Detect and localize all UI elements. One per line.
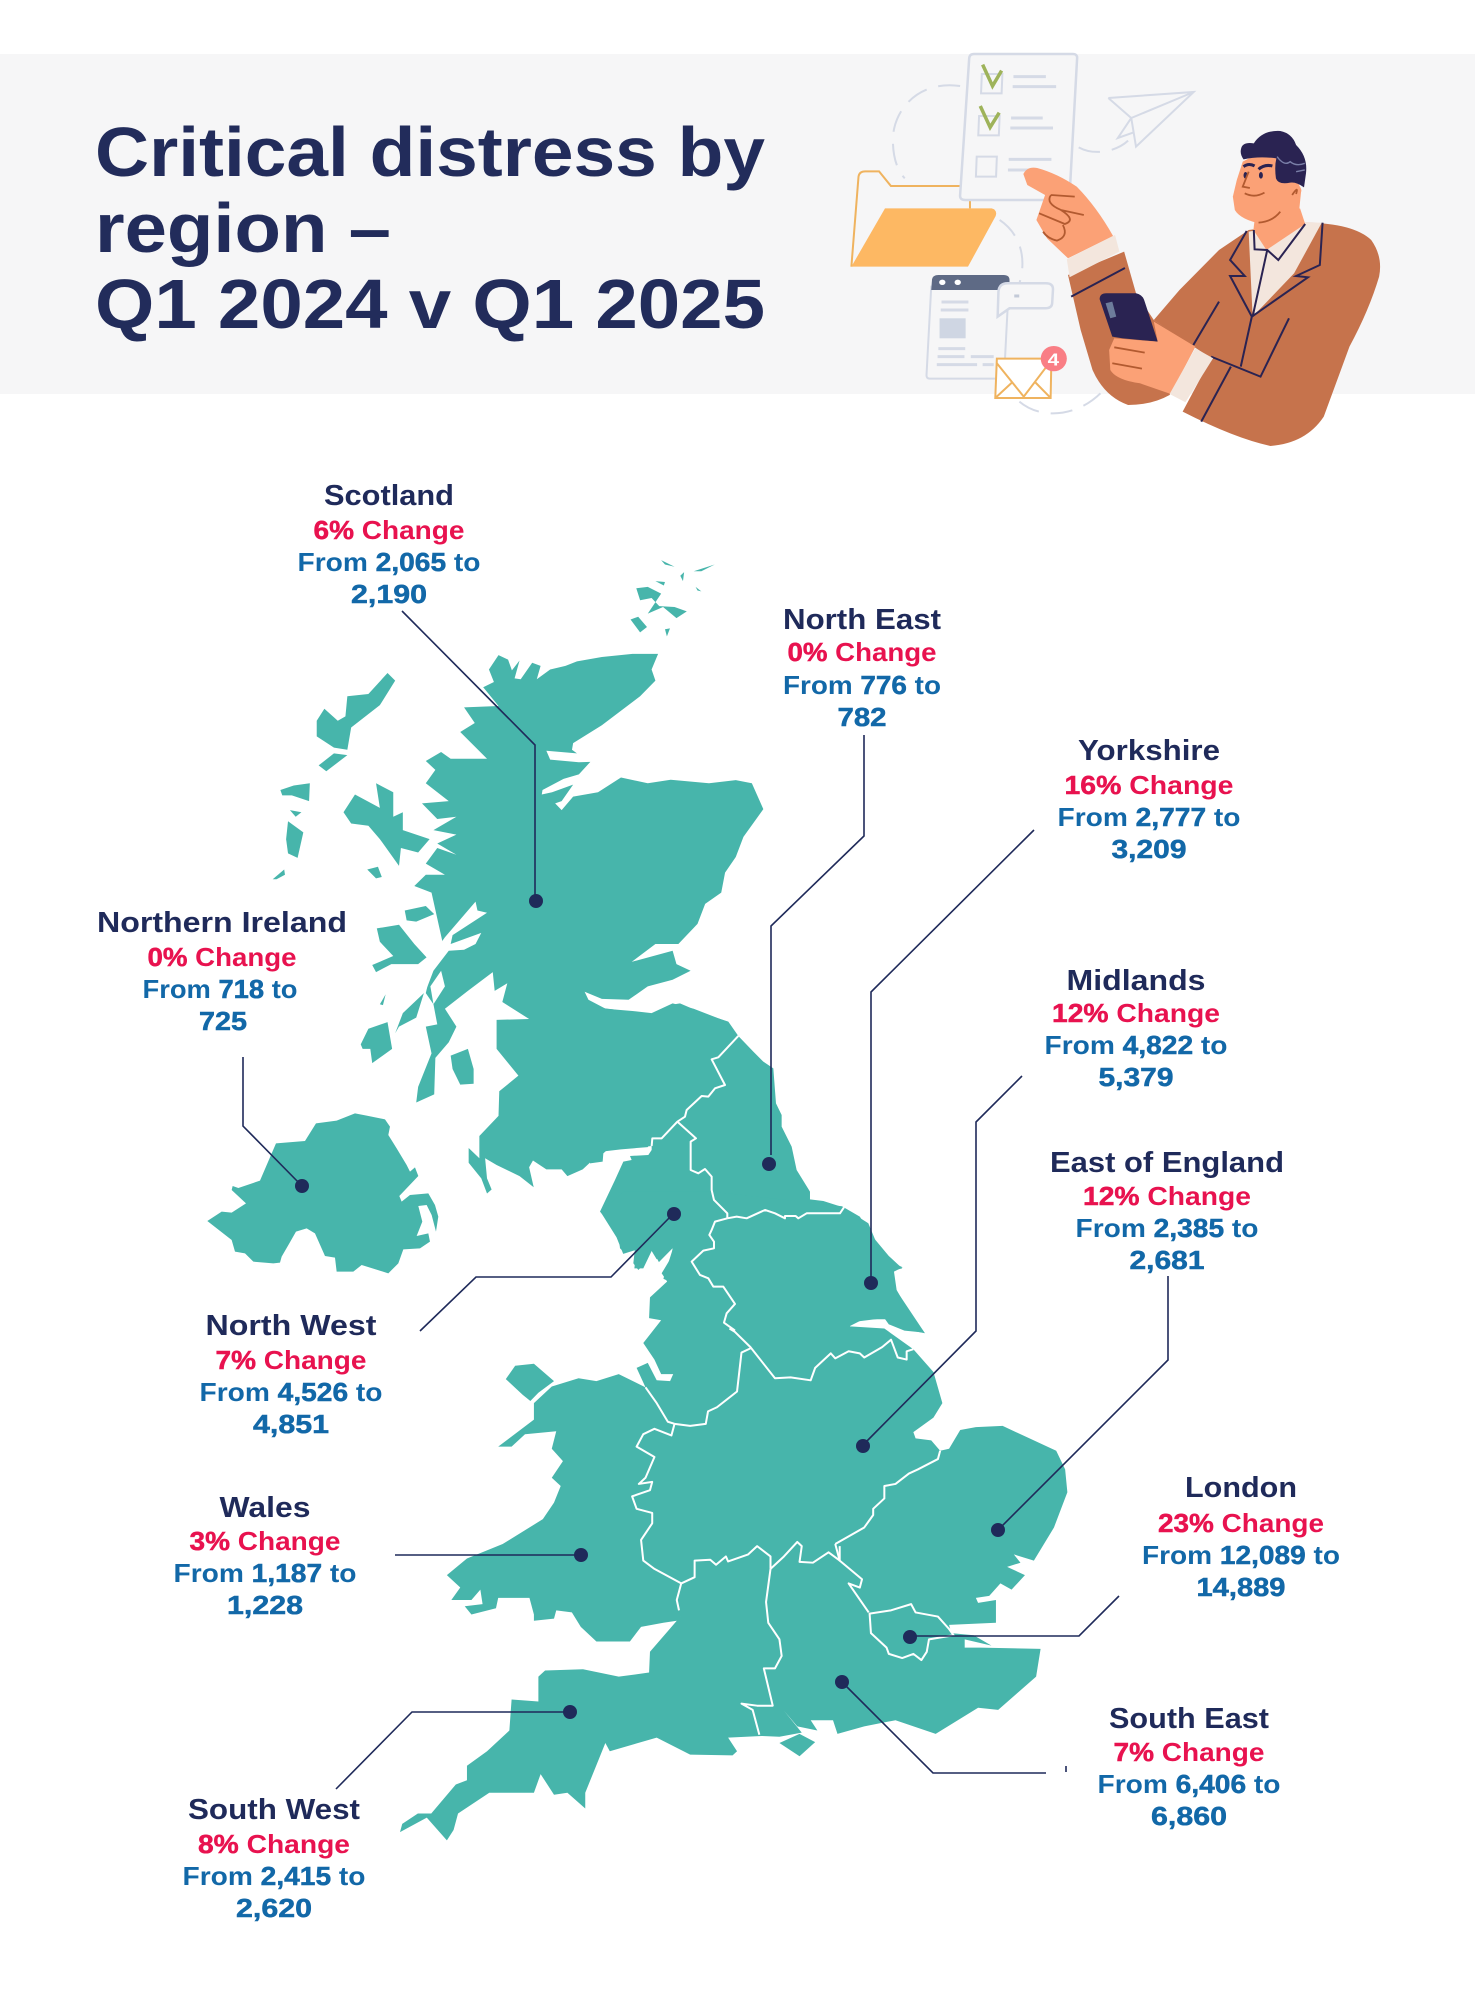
callout: Scotland: 2,190 — [351, 579, 427, 609]
callout: South East: 6,860 — [1151, 1801, 1227, 1831]
callout: North East: 782 — [838, 702, 886, 732]
callout: North East: From 776 to — [783, 670, 941, 700]
envelope with badge — [995, 346, 1067, 398]
head and hair — [1233, 131, 1306, 224]
callout: Northern Ireland — [97, 907, 347, 1193]
callout: Wales: 1,228 — [227, 1590, 303, 1620]
callout: Wales: 3% Change — [190, 1526, 340, 1556]
speech bubble — [998, 283, 1053, 317]
dashed paths — [893, 85, 1128, 413]
callout: London: London — [1185, 1472, 1297, 1504]
callout: Northern Ireland: 0% Change — [148, 942, 296, 972]
callout: Scotland: Scotland — [324, 480, 454, 512]
callout: East of England: 2,681 — [1130, 1245, 1204, 1275]
pointing hand — [1023, 168, 1119, 277]
callout: North West — [200, 1207, 681, 1439]
header band — [0, 54, 1475, 394]
callout: South West: From 2,415 to — [182, 1861, 365, 1891]
callout: East of England — [991, 1147, 1284, 1537]
Scotland and islands — [273, 560, 763, 1194]
callout: Midlands: Midlands — [1066, 965, 1206, 997]
callout: South East: From 6,406 to — [1098, 1769, 1280, 1799]
callout: North West: 7% Change — [216, 1345, 366, 1375]
callout: Midlands: 5,379 — [1098, 1062, 1174, 1092]
callout: North East — [762, 604, 941, 1171]
paper plane — [1108, 92, 1194, 147]
browser window — [926, 275, 1010, 379]
callout: London: 14,889 — [1196, 1572, 1286, 1602]
callout: Midlands — [856, 965, 1228, 1453]
Northern Ireland shape — [207, 1113, 438, 1273]
callout: Scotland — [298, 480, 543, 908]
checklist document — [960, 54, 1077, 200]
jacket body — [1154, 223, 1380, 446]
callout: Yorkshire: Yorkshire — [1078, 735, 1220, 767]
callout: North West: North West — [206, 1310, 377, 1342]
northern region borders — [652, 1036, 844, 1331]
callout: London: 23% Change — [1158, 1508, 1324, 1538]
shirt and neck — [1193, 208, 1323, 422]
callout: Wales: Wales — [220, 1492, 310, 1524]
callout: South West — [182, 1705, 577, 1923]
callout: South West: 8% Change — [198, 1829, 350, 1859]
callout: East of England: From 2,385 to — [1076, 1213, 1258, 1243]
callout: North West: From 4,526 to — [200, 1377, 382, 1407]
callout: Northern Ireland: 725 — [199, 1006, 247, 1036]
callout: Yorkshire: 16% Change — [1064, 770, 1234, 800]
callout: South East — [835, 1675, 1280, 1831]
callout: North West: 4,851 — [253, 1409, 329, 1439]
callout: Yorkshire: From 2,777 to — [1058, 802, 1240, 832]
phone hand — [1109, 322, 1213, 402]
callout: Scotland: 6% Change — [314, 515, 464, 545]
callout: South East: 7% Change — [1114, 1737, 1264, 1767]
callout: South West: 2,620 — [236, 1893, 312, 1923]
callout: Wales — [174, 1492, 588, 1620]
callout: Wales: From 1,187 to — [174, 1558, 356, 1588]
callout: North East: North East — [783, 604, 941, 636]
Northern England shape — [590, 1003, 925, 1340]
sleeve — [1068, 252, 1195, 405]
title: Q1 2024 v Q1 2025 — [95, 265, 765, 343]
map of the UK — [207, 560, 1067, 1840]
title: Critical distress by — [95, 113, 765, 191]
callout: London: From 12,089 to — [1142, 1540, 1340, 1570]
title: region – — [95, 189, 391, 267]
callout: South East: South East — [1109, 1703, 1269, 1735]
England and Wales shapes and borders — [400, 1192, 1067, 1840]
title — [95, 113, 765, 343]
callout: Midlands: From 4,822 to — [1044, 1030, 1228, 1060]
callout: London — [903, 1472, 1340, 1644]
callout: East of England: East of England — [1050, 1147, 1284, 1179]
callout: Scotland: From 2,065 to — [298, 547, 480, 577]
callout: South West: South West — [188, 1794, 360, 1826]
envelope with badge: 4 — [1048, 351, 1060, 370]
callout: North East: 0% Change — [788, 637, 936, 667]
callout: East of England: 12% Change — [1083, 1181, 1251, 1211]
callout: Northern Ireland: From 718 to — [142, 974, 298, 1004]
callout: Midlands: 12% Change — [1052, 998, 1220, 1028]
callout: Yorkshire — [864, 735, 1240, 1290]
folder — [851, 171, 996, 267]
callout: Yorkshire: 3,209 — [1112, 834, 1186, 864]
callout: Northern Ireland: Northern Ireland — [97, 907, 347, 939]
phone — [1100, 293, 1158, 342]
illustration: man with phone pointing at checklist — [851, 54, 1380, 446]
